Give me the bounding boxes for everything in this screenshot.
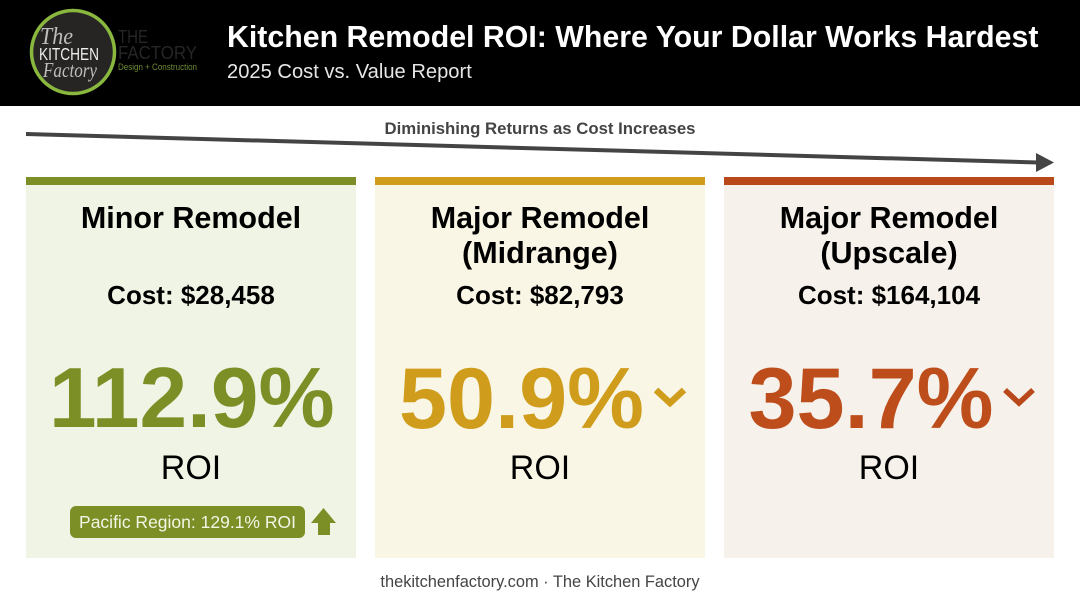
- cost: Cost: $82,793: [456, 280, 624, 310]
- icon: up arrow: [311, 508, 336, 535]
- panel heading: Minor Remodel: [81, 201, 301, 235]
- logo: THE: [118, 27, 148, 47]
- panel heading: Major Remodel: [431, 201, 649, 235]
- logo: FACTORY: [118, 43, 197, 63]
- ROI percentage: 112.9%: [49, 351, 335, 446]
- cost: Cost: $28,458: [107, 280, 275, 310]
- panel accent bar: [26, 177, 356, 185]
- icon: down chevron: [654, 388, 686, 408]
- panel accent bar: [724, 177, 1054, 185]
- logo: KITCHEN: [39, 44, 99, 64]
- panel: major remodel upscale: [724, 177, 1054, 558]
- cost: Cost: $164,104: [798, 280, 980, 310]
- ROI percentage: 50.9%: [399, 351, 644, 447]
- panel heading: [431, 201, 649, 270]
- ROI percentage: 35.7%: [748, 351, 993, 447]
- logo: Factory: [42, 58, 98, 82]
- arrow label: Diminishing Returns as Cost Increases: [385, 119, 695, 138]
- title: Kitchen Remodel ROI: Where Your Dollar Works Hardest: [227, 21, 1038, 54]
- footer: thekitchenfactory.com · The Kitchen Factory: [380, 573, 700, 591]
- panel heading: Major Remodel: [780, 201, 998, 235]
- panel heading: [780, 201, 998, 270]
- panel: major remodel midrange: [375, 177, 705, 558]
- logo: The: [40, 24, 73, 50]
- panel heading: (Midrange): [462, 236, 618, 270]
- ROI label: ROI: [161, 449, 221, 487]
- ROI label: ROI: [510, 449, 570, 487]
- logo: [30, 8, 197, 96]
- trend arrow: diminishing returns: [26, 132, 1054, 172]
- icon: down chevron: [1003, 388, 1035, 407]
- header band: [0, 0, 1080, 106]
- callout: pacific region: [70, 506, 305, 538]
- panel heading: (Upscale): [820, 236, 958, 270]
- ROI label: ROI: [859, 449, 919, 487]
- subtitle: 2025 Cost vs. Value Report: [227, 61, 472, 83]
- callout: pacific region: Pacific Region: 129.1% ROI: [79, 512, 296, 532]
- panel: minor remodel: [26, 177, 356, 558]
- logo: Design + Construction: [118, 62, 197, 72]
- panel accent bar: [375, 177, 705, 185]
